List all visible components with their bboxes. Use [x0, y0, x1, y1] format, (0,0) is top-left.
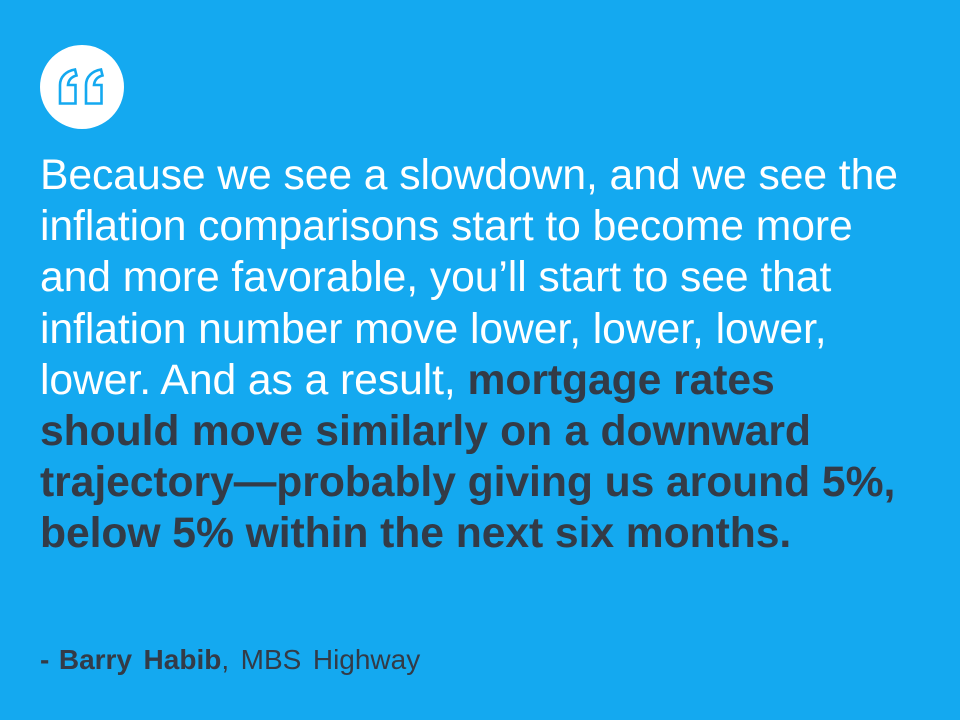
quote text: lower. And as a result, mortgage rates [40, 356, 775, 404]
quote text [40, 151, 898, 557]
quote text: inflation comparisons start to become more [40, 202, 853, 250]
quote text: Because we see a slowdown, and we see the [40, 151, 898, 199]
icon: quotation mark badge [40, 45, 124, 129]
quote text: below 5% within the next six months. [40, 509, 791, 557]
quote text: inflation number move lower, lower, lower, [40, 305, 827, 353]
quote text: trajectory—probably giving us around 5%, [40, 458, 895, 506]
quote text: and more favorable, you’ll start to see that [40, 253, 831, 301]
quote text: should move similarly on a downward [40, 407, 811, 455]
attribution: - Barry Habib, MBS Highway [40, 644, 420, 675]
